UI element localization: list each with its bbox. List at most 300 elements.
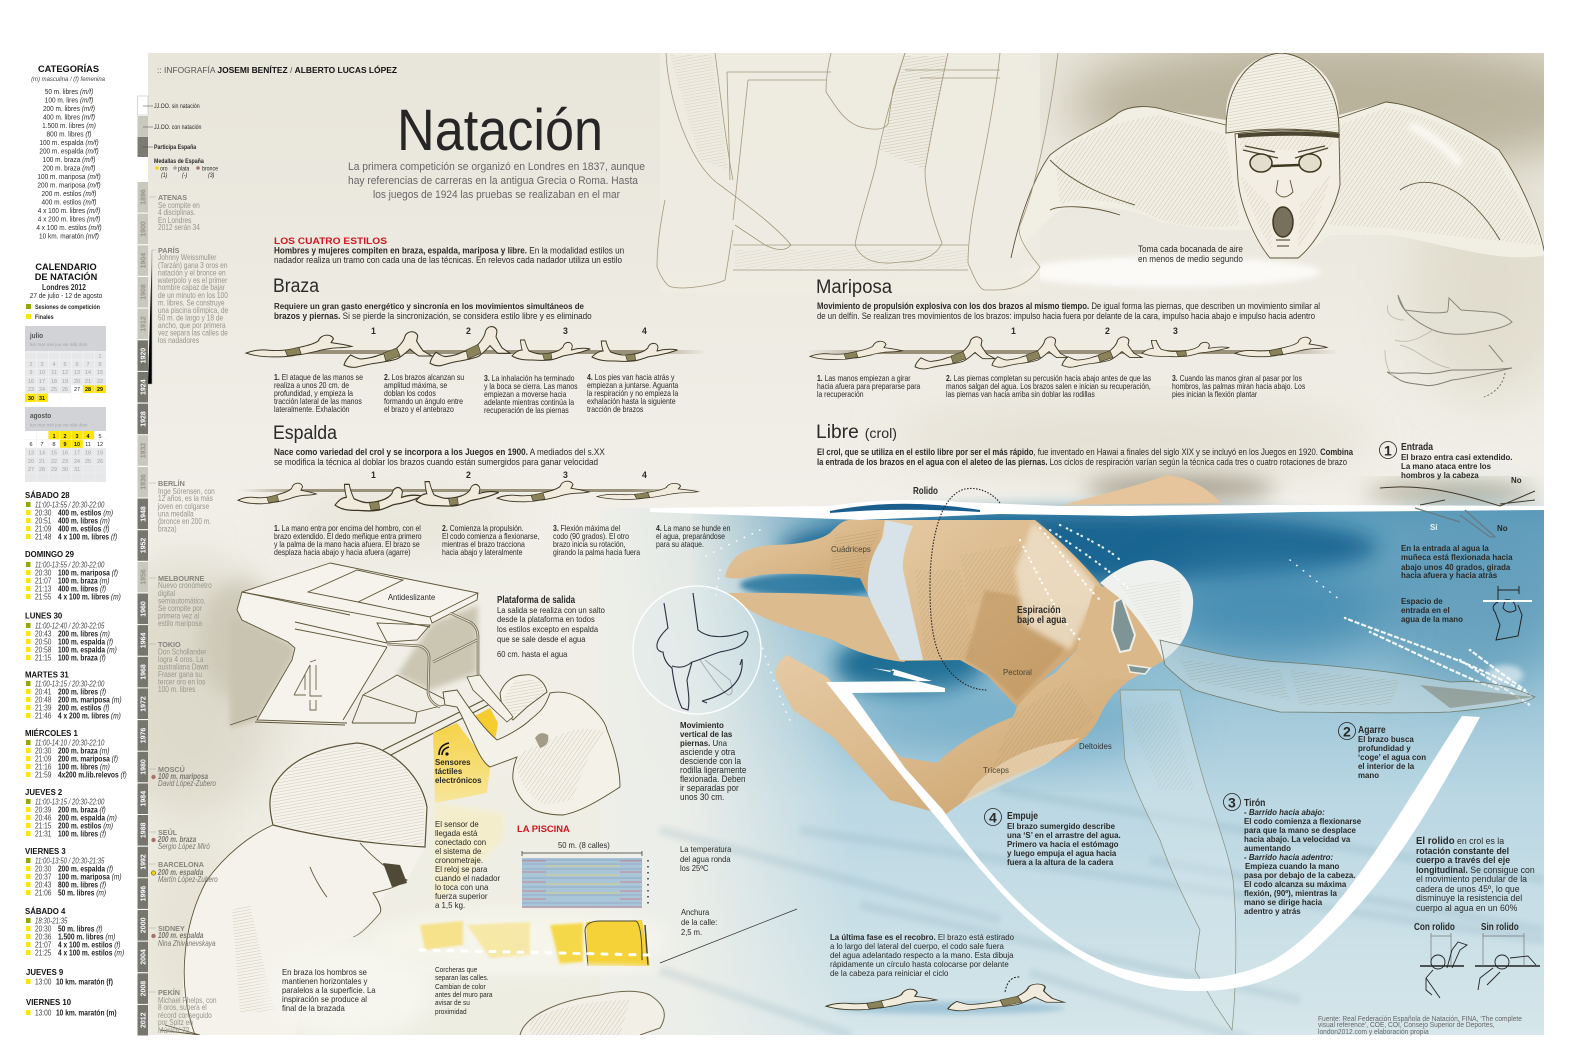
section: braza: profundidad, y empieza la — [274, 389, 354, 398]
timeline legend: Medallas de España — [154, 159, 205, 165]
sidebar: categorias: (m) masculina / (f) femenina — [31, 76, 105, 83]
schedule: day by day: 21:39 — [35, 703, 51, 713]
upper leg — [725, 520, 888, 595]
callout: 1 entrada: En la entrada al agua la — [1401, 544, 1489, 553]
text: el rolido: El rolido en crol es la — [1416, 836, 1505, 847]
text: en braza: paralelos a la superficie. La — [282, 986, 376, 995]
callout: 4 empuje — [984, 808, 1121, 867]
illustration: feet on starting block — [657, 53, 1058, 290]
section: braza: Requiere un gran gasto energético y sincronía en los movimientos simultáneos de — [274, 302, 584, 311]
calendar: julio: 19 — [62, 379, 68, 385]
timeline notes: host cities: 50 m. de largo y 18 de — [158, 313, 223, 323]
schedule: day by day: 21:16 — [35, 762, 51, 772]
timeline notes: host cities: estilo mariposa — [158, 618, 203, 628]
sidebar: categorias: 200 m. mariposa (m/f) — [37, 182, 101, 190]
sidebar: categorias: 400 m. estilos (m/f) — [42, 199, 96, 207]
timeline notes: host cities: semiautomático. — [158, 596, 206, 606]
timeline notes: host cities: primera vez al — [158, 611, 199, 621]
callout: 1 entrada: No — [1497, 524, 1508, 533]
text: el rolido: cadera de unos 45º, lo que — [1416, 884, 1520, 894]
schedule: day by day: 100 m. mariposa (m) — [58, 872, 122, 882]
schedule: day by day: 200 m. estilos (m) — [58, 821, 113, 831]
illustration: recovery swimmers — [826, 977, 1065, 1014]
intro paragraph: los juegos de 1924 las pruebas se realizaban en el mar — [373, 189, 620, 201]
timeline years bar: 1936 — [140, 474, 148, 490]
schedule: day by day: 400 m. estilos (m) — [58, 508, 113, 518]
section: braza: tracción lateral de las manos — [274, 397, 362, 406]
white S-shaped stroke path of the hand — [826, 668, 1480, 991]
callout: 2 agarre: 2 — [1343, 724, 1351, 740]
calendar: julio: 12 — [62, 370, 68, 376]
text: el rolido: cuerpo a través del eje — [1416, 855, 1510, 865]
schedule: day by day: 11:00-13:15 / 20:30-22:00 — [35, 798, 104, 807]
text: plataforma de salida: los estilos excepto en espalda — [497, 625, 599, 634]
timeline legend: JJ.OO. con natación — [154, 125, 201, 131]
section: espalda: se modifica la técnica al doblar los brazos cuando están sumergidos para ganar velocidad — [274, 457, 598, 467]
sidebar: categorias: 100 m. lires (m/f) — [45, 97, 93, 105]
callout: 1 entrada: Entrada — [1401, 441, 1434, 453]
timeline notes: host cities: Nuevo cronómetro — [158, 580, 212, 590]
callout: 4 empuje: Empuje — [1007, 810, 1038, 822]
section: mariposa: 3 — [1173, 326, 1178, 336]
section: espalda: 3. Flexión máxima del — [553, 524, 620, 533]
arm — [776, 652, 1130, 815]
calendar: agosto: 22 — [51, 459, 57, 465]
section: espalda: hacia abajo y lateralmente — [442, 548, 523, 557]
section: mariposa: hacia afuera para prepararse para — [817, 382, 921, 391]
text: anchura de la calle with leader line: 2,5 m. — [681, 928, 702, 937]
sidebar: categorias — [31, 63, 105, 241]
text: temperatura: del agua ronda — [680, 855, 731, 864]
schedule: day by day: 20:36 — [35, 932, 51, 942]
schedule: day by day: 20:43 — [35, 629, 51, 639]
heading: los cuatro estilos: Hombres y mujeres compiten en braza, espalda, mariposa y libre. En la modalidad estilos un — [274, 245, 624, 256]
icons: con rolido / sin rolido: Con rolido — [1414, 921, 1455, 932]
calendar: agosto: 20 — [28, 459, 34, 465]
calendar: julio: 28 — [85, 387, 91, 393]
calendar: julio: 5 — [64, 362, 66, 368]
schedule: day by day: 21:55 — [35, 592, 51, 602]
timeline years bar: 1984 — [140, 791, 148, 806]
sidebar: categorias: 4 x 100 m. estilos (m/f) — [36, 225, 102, 232]
sidebar: categorias: 10 km. maratón (m/f) — [39, 233, 99, 241]
water surface line — [650, 500, 1544, 520]
source — [1318, 1015, 1522, 1036]
sidebar: categorias: 4 x 200 m. libres (m/f) — [38, 216, 100, 224]
timeline notes: host cities: Michael Phelps, con — [158, 995, 217, 1005]
timeline notes: host cities: Nina Zhivanevskaya — [158, 939, 216, 948]
timeline notes: host cities: tercer oro en los — [158, 677, 206, 687]
text: corcheras — [435, 967, 493, 1016]
schedule: day by day: JUEVES 9 — [26, 968, 64, 977]
section: mariposa: Mariposa — [816, 277, 892, 298]
text: corcheras: separan las calles. — [435, 975, 489, 982]
timeline notes: host cities: por Spitz en — [158, 1017, 193, 1027]
calendar: julio: 16 — [28, 379, 34, 385]
timeline years bar: 1908 — [140, 284, 148, 300]
section: espalda: El codo comienza a flexionarse, — [442, 532, 539, 541]
schedule: day by day: 21:15 — [35, 653, 51, 663]
callout: 4 empuje: 4 — [989, 810, 997, 826]
text: en braza — [282, 968, 376, 1013]
text: movimiento vertical: flexionada. Deben — [680, 774, 746, 784]
sidebar: categorias: 100 m. espalda (m/f) — [39, 140, 99, 147]
callout: 2 agarre: Agarre — [1358, 724, 1386, 736]
schedule: day by day: 20:37 — [35, 872, 51, 882]
icons: con rolido / sin rolido: Sin rolido — [1481, 921, 1519, 932]
schedule: day by day: 200 m. braza (f) — [58, 805, 106, 815]
sidebar: categorias: 4 x 100 m. libres (m/f) — [38, 208, 100, 215]
schedule: day by day: 100 m. libres (m) — [58, 762, 110, 772]
timeline notes: host cities: waterpolo y es el primer — [157, 275, 228, 285]
schedule: day by day: 200 m. estilos (f) — [58, 703, 109, 713]
calendar: julio: 14 — [85, 370, 91, 376]
schedule: day by day: 21:46 — [35, 711, 51, 721]
calendar: julio — [25, 326, 106, 402]
schedule: day by day: SÁBADO 4 — [25, 907, 66, 916]
timeline years bar: 1952 — [140, 538, 148, 553]
schedule: day by day: 11:00-14:10 / 20:30-22:10 — [35, 739, 104, 748]
trunks — [868, 520, 923, 660]
timeline years bar: 1912 — [140, 316, 148, 332]
timeline years bar: 1928 — [140, 411, 148, 427]
schedule: day by day: VIERNES 3 — [25, 847, 66, 856]
section: braza: empiezan a juntarse. Aguanta — [587, 381, 679, 390]
section: braza: 2 — [466, 326, 471, 336]
calendar: julio: 30 — [28, 396, 34, 402]
calendar legend: Finales — [35, 315, 54, 321]
schedule: day by day: 20:39 — [35, 805, 51, 815]
section: mariposa: 2. Las piernas completan su percusión hacia abajo antes de que las — [946, 374, 1152, 383]
source: visual reference’, COE, COI, Consejo Superior de Deportes, — [1318, 1021, 1495, 1029]
text: movimiento vertical: asciende y otra — [680, 747, 735, 757]
text: sensores tactiles: Sensores — [435, 758, 471, 767]
schedule: day by day: 20:50 — [35, 637, 51, 647]
calendar legend: Sesiones de competición — [35, 305, 100, 311]
section: mariposa: Movimiento de propulsión explosiva con los dos brazos al mismo tiempo. De igual forma las piernas, que describen un movimiento similar al — [817, 301, 1320, 311]
timeline notes: host cities: SEÚL — [158, 828, 178, 837]
calendar: julio: 24 — [39, 387, 45, 393]
timeline notes: host cities: natación y el bronce en — [158, 268, 226, 278]
schedule: day by day: 400 m. libres (f) — [58, 584, 106, 594]
section: espalda: el agua, preparándose — [656, 532, 725, 541]
callout: 1 entrada: agua de la mano — [1401, 615, 1463, 624]
calendar: julio: 2 — [30, 362, 32, 368]
callout: 3 tiron: - Barrido hacia abajo: — [1244, 808, 1325, 817]
text: movimiento vertical — [680, 721, 747, 802]
section: braza: 1. El ataque de las manos se — [274, 373, 363, 382]
text: en braza: mantienen horizontales y — [282, 977, 367, 986]
timeline notes: host cities: David López-Zubero — [158, 779, 216, 788]
schedule: day by day — [25, 491, 127, 1018]
schedule: day by day: 20:51 — [35, 516, 51, 526]
callout: 4 empuje: El brazo sumergido describe — [1007, 822, 1115, 831]
timeline years bar: 1896 — [140, 189, 148, 205]
timeline notes: host cities: En Londres — [158, 215, 192, 225]
timeline legend: (1) — [161, 173, 168, 179]
timeline notes: host cities — [148, 193, 228, 1035]
icon: dolphin and butterfly comparison — [1385, 295, 1512, 397]
schedule: day by day: 200 m. libres (f) — [58, 687, 106, 697]
section: espalda: 4. La mano se hunde en — [656, 524, 730, 533]
calendar: julio: 8 — [98, 362, 102, 368]
schedule: day by day: 20:48 — [35, 695, 51, 705]
text: plataforma de salida: Antideslizante — [388, 593, 436, 602]
timeline notes: host cities: australiana Dawn — [158, 662, 209, 672]
text: movimiento vertical: vertical de las — [680, 730, 733, 739]
source: london2012.com y elaboración propia — [1318, 1028, 1429, 1036]
calendar: agosto: 21 — [39, 459, 45, 465]
labels on the swimmer: bajo el agua — [1017, 614, 1067, 626]
timeline legend: bronce — [202, 166, 218, 173]
text: el rolido — [1416, 836, 1535, 913]
timeline notes: host cities: Múnich’ 72 — [158, 1025, 189, 1035]
section: braza: y la boca se cierra. Las manos — [484, 382, 578, 391]
labels on the swimmer: Pectoral — [1003, 668, 1032, 677]
calendar: agosto: 27 — [28, 467, 34, 473]
timeline notes: host cities: hombre capaz de bajar — [158, 282, 225, 292]
illustration: breaststroke swimmer profile sketch — [160, 743, 435, 1040]
illustration: starting block and crouching swimmer — [230, 563, 620, 905]
schedule: day by day: 10 km. maratón (f) — [56, 977, 113, 987]
section: braza: lateralmente. Exhalación — [274, 405, 350, 414]
section: espalda: brazo extendido. El dedo meñique entra primero — [274, 532, 422, 541]
section: mariposa: la recuperación — [817, 390, 864, 399]
schedule: day by day: 11:00-13:55 / 20:30-22:00 — [35, 501, 104, 510]
schedule: day by day: 20:43 — [35, 880, 51, 890]
schedule: day by day: MARTES 31 — [25, 670, 69, 680]
text: sensores tactiles — [435, 743, 500, 910]
callout: 1 entrada: entrada en el — [1401, 606, 1450, 615]
callout: 1 entrada — [1380, 441, 1522, 624]
section: mariposa: 1. Las manos empiezan a girar — [817, 374, 911, 383]
schedule: day by day: 4 x 200 m. libres (m) — [58, 711, 121, 721]
schedule: day by day: 100 m. espalda (f) — [58, 637, 113, 647]
schedule: day by day: 21:15 — [35, 821, 51, 831]
text: sensores tactiles: El reloj se para — [435, 865, 488, 874]
timeline years bar: 1924 — [140, 379, 148, 395]
callout: 4 empuje: y luego empuja el agua hacia — [1007, 849, 1117, 858]
schedule: day by day: LUNES 30 — [25, 612, 63, 620]
callout: 1 entrada: 1 — [1384, 442, 1392, 458]
schedule: day by day: 4 x 100 m. libres (m) — [58, 592, 121, 602]
sidebar: categorias: 100 m. braza (m/f) — [43, 157, 95, 164]
schedule: day by day: 13:00 — [35, 977, 51, 987]
timeline notes: host cities: una piscina olímpica, de — [158, 305, 228, 315]
section: mariposa: de un delfín. Se realizan tres movimientos de los brazos: impulso hacia fuera por delante de la cara, impulso hacia abajo e impulso hacia adentro — [817, 311, 1315, 321]
schedule: day by day: 400 m. estilos (f) — [58, 524, 109, 534]
section: mariposa: hombros, las palmas miran hacia abajo. Los — [1172, 382, 1306, 391]
splash — [700, 525, 1530, 720]
timeline years bar: 1900 — [140, 221, 148, 237]
callout: 1 entrada: El brazo entra casi extendido. — [1401, 453, 1513, 462]
labels on the swimmer — [831, 485, 1112, 775]
timeline notes: host cities: 12 años, es la más — [158, 493, 213, 503]
calendar: agosto: 2 — [64, 434, 66, 440]
section: braza: el brazo y el antebrazo — [384, 405, 454, 414]
calendar: agosto: 12 — [97, 442, 103, 448]
section: braza: Braza — [273, 276, 319, 297]
calendar: agosto: 18 — [85, 450, 91, 456]
yellow sensor plate — [433, 723, 490, 803]
calendar: agosto: 28 — [39, 467, 45, 473]
section: espalda: Nace como variedad del crol y se incorpora a los Juegos en 1900. A mediados del s.XX — [274, 447, 605, 457]
calendar: julio: 4 — [52, 362, 56, 368]
byline: :: INFOGRAFÍA JOSEMI BENÍTEZ / ALBERTO LUCAS LÓPEZ — [157, 66, 397, 75]
chart: la piscina diagram — [517, 823, 648, 908]
section: espalda: 1 — [371, 470, 376, 480]
calendar: julio: 21 — [85, 379, 91, 385]
timeline years bar: 1996 — [140, 886, 148, 901]
timeline years bar: 2000 — [140, 917, 148, 933]
sidebar: categorias: 200 m. libres (m/f) — [43, 106, 95, 113]
sidebar: categorias: 100 m. mariposa (m/f) — [37, 174, 101, 181]
calendar: agosto: 14 — [39, 450, 45, 456]
timeline years bar: 1904 — [140, 253, 148, 268]
text: corcheras: antes del muro para — [435, 992, 493, 999]
text: sensores tactiles: cronometraje. — [435, 856, 483, 865]
timeline legend: oro — [160, 166, 168, 173]
labels on the swimmer: Espiración — [1017, 604, 1061, 616]
callout: 3 tiron: - Barrido hacia adentro: — [1244, 853, 1333, 862]
timeline years bar: 2012 — [140, 1012, 148, 1028]
calendar: agosto: 19 — [97, 450, 103, 456]
schedule: day by day: 200 m. espalda (f) — [58, 864, 113, 874]
timeline notes: host cities: Se compite en — [158, 200, 200, 210]
timeline years bar: 1920 — [140, 348, 148, 363]
timeline notes: host cities: MELBOURNE — [158, 574, 205, 583]
schedule: day by day: 50 m. libres (f) — [58, 924, 102, 934]
calendar: julio: 6 — [76, 362, 78, 368]
text: sensores tactiles: El sensor de — [435, 820, 479, 829]
schedule: day by day: 200 m. libres (m) — [58, 629, 110, 639]
section: espalda: 1. La mano entra por encima del hombro, con el — [274, 524, 421, 533]
schedule: day by day: 21:09 — [35, 754, 51, 764]
sidebar: categorias: 200 m. espalda (m/f) — [39, 148, 99, 156]
callout: 1 entrada: hombros y la cabeza — [1401, 471, 1479, 480]
section: espalda: 2. Comienza la propulsión. — [442, 524, 524, 533]
schedule: day by day: 4 x 100 m. libres (f) — [58, 532, 117, 542]
schedule: day by day: 21:25 — [35, 948, 51, 958]
timeline notes: host cities: braza) — [158, 524, 177, 534]
text: sensores tactiles: el sistema de — [435, 847, 482, 856]
section: espalda: 4 — [642, 470, 648, 480]
calendar: agosto: 25 — [85, 459, 91, 465]
illustration: ghost extended arm and reaching arm — [1120, 640, 1535, 1030]
callout: 3 tiron: hacia abajo. La velocidad va — [1244, 835, 1351, 844]
illustration: yellow lane ropes — [370, 910, 670, 1035]
sidebar: categorias: 200 m. braza (m/f) — [43, 165, 95, 173]
section: braza: 4. Los pies van hacia atrás y — [587, 373, 675, 382]
timeline notes: host cities: Martín López-Zubero — [158, 875, 218, 884]
section: braza: realiza a unos 20 cm. de — [274, 381, 349, 390]
section: braza: recuperación de las piernas — [484, 406, 569, 415]
text: plataforma de salida: que se sale desde el agua — [497, 635, 586, 644]
text: sensores tactiles: cuando el nadador — [435, 874, 500, 883]
calendar: julio: 22 — [97, 379, 103, 385]
schedule: day by day: 200 m. mariposa (m) — [58, 695, 122, 705]
schedule: day by day: DOMINGO 29 — [25, 550, 75, 559]
section: espalda: Espalda — [273, 423, 337, 444]
callout: 3 tiron: pasa por debajo de la cabeza. — [1244, 871, 1356, 880]
section: braza: formando un ángulo entre — [384, 397, 463, 406]
text: sensores tactiles: táctiles — [435, 767, 463, 776]
section: libre crol: Libre (crol) — [816, 422, 897, 443]
callout: 1 entrada: Espacio de — [1401, 597, 1443, 606]
schedule: day by day: 21:07 — [35, 576, 51, 586]
timeline notes: host cities: 8 oros, supera el — [158, 1002, 207, 1012]
callout: 2 agarre: ‘coge’ el agua con — [1358, 753, 1426, 762]
schedule: day by day: 200 m. braza (m) — [58, 746, 109, 756]
timeline legend: Participa España — [154, 145, 197, 151]
timeline years bar: 1972 — [140, 696, 148, 712]
timeline notes: host cities: Se compite por — [158, 603, 203, 613]
timeline notes: host cities: una medalla — [158, 509, 194, 519]
section: mariposa: 3. Cuando las manos giran al pasar por los — [1172, 374, 1302, 383]
section: espalda: mientras el brazo tracciona — [442, 540, 526, 549]
calendar: julio: 20 — [74, 379, 80, 385]
calendar: agosto: 15 — [51, 450, 57, 456]
schedule: day by day: 20:30 — [35, 864, 51, 874]
schedule: day by day: 21:07 — [35, 940, 51, 950]
timeline notes: host cities: 200 m. braza — [157, 835, 196, 844]
timeline notes: host cities: digital — [158, 588, 175, 598]
schedule: day by day: 10 km. maratón (m) — [56, 1008, 117, 1018]
timeline years bar: 2004 — [140, 949, 148, 965]
timeline notes: host cities: logra 4 oros. La — [158, 654, 204, 664]
calendar: agosto: agosto — [30, 413, 51, 420]
schedule: day by day: 21:06 — [35, 888, 51, 898]
calendar: julio: 9 — [30, 370, 32, 376]
chart: la piscina diagram: LA PISCINA — [517, 823, 570, 834]
schedule: day by day: 21:59 — [35, 770, 51, 780]
calendar: agosto: 29 — [51, 467, 57, 473]
calendar: julio: lun mar mié jue vie sáb dom — [30, 342, 88, 347]
callout: 1 entrada: hacia afuera y hacia atrás — [1401, 571, 1498, 580]
text: la ultima fase recobro: de la cabeza para reiniciar el ciclo — [830, 969, 949, 978]
text: anchura de la calle with leader line: Anchura — [681, 908, 710, 917]
text: plataforma de salida: desde la plataforma en todos — [497, 615, 595, 624]
section: braza: brazos y piernas. Si se pierde la sincronización, se considera estilo libre y es eliminado — [274, 311, 592, 321]
callout: 1 entrada: La mano ataca entre los — [1401, 462, 1491, 471]
heading: los cuatro estilos: LOS CUATRO ESTILOS — [274, 236, 388, 247]
text: anchura de la calle with leader line — [660, 908, 797, 963]
section: libre crol: El crol, que se utiliza en el estilo libre por ser el más rápido, fue inventado en Hawai a finales del siglo XIX y se incluyó en los Juegos en 1920. Combina — [817, 447, 1353, 457]
source: Fuente: Real Federación Española de Natación, FINA, ‘The complete — [1318, 1015, 1522, 1023]
timeline notes: host cities: PARÍS — [158, 246, 180, 255]
callout: 3 tiron: Tirón — [1244, 797, 1265, 809]
cap — [1100, 560, 1193, 660]
section: espalda: para su ataque. — [656, 540, 704, 549]
sidebar: calendar title: CALENDARIO — [35, 262, 97, 272]
calendar: agosto: 31 — [74, 467, 80, 473]
labels on the swimmer: Rolido — [913, 485, 938, 496]
schedule: day by day: 21:48 — [35, 532, 51, 542]
calendar: julio: 31 — [39, 396, 45, 402]
calendar: julio: 29 — [97, 387, 103, 393]
intro paragraph: hay referencias de carreras en la antigua Grecia o Roma. Hasta — [348, 175, 639, 187]
schedule: day by day: 20:41 — [35, 687, 51, 697]
schedule: day by day: 20:30 — [35, 508, 51, 518]
schedule: day by day: 21:13 — [35, 584, 51, 594]
timeline notes: host cities: ATENAS — [158, 193, 187, 202]
text: temperatura: La temperatura — [680, 845, 732, 854]
callout: 3 tiron: mano se dirige hacia — [1244, 898, 1323, 907]
lower leg — [728, 593, 905, 662]
chart: la piscina diagram: 50 m. (8 calles) — [558, 841, 610, 850]
back hump above water — [1063, 475, 1222, 505]
schedule: day by day: 20:30 — [35, 568, 51, 578]
